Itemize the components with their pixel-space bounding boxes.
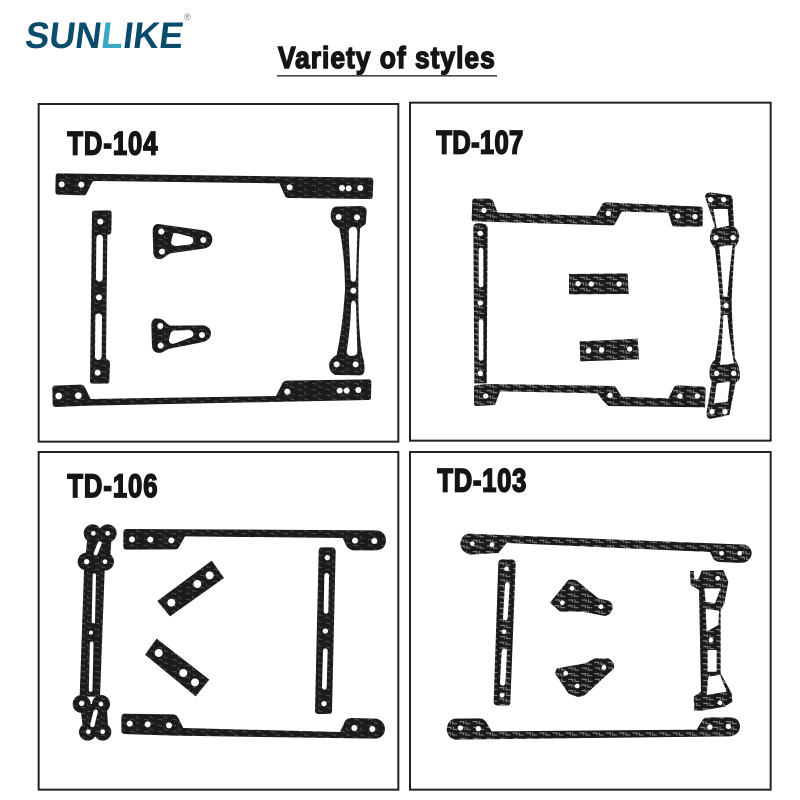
part: lower rectangular plate (580, 339, 639, 361)
part: top plate (472, 199, 703, 227)
logo: SUNLIKE: ® (184, 12, 191, 22)
logo: SUNLIKE: SUNLIKE (23, 14, 186, 56)
label: TD-106: TD-106 (67, 469, 157, 505)
title: Variety of styles: Variety of styles (278, 41, 495, 76)
label: TD-103: TD-103 (437, 464, 526, 499)
part: bottom plate (474, 384, 706, 407)
part: left vertical bar (494, 559, 516, 706)
part: left dog-bone bar (73, 524, 117, 741)
panel: TD-104 (39, 104, 398, 442)
part: bottom plate (121, 714, 385, 739)
part: angled plate lower (145, 639, 209, 696)
part: left vertical bar (473, 223, 488, 383)
part: upper rectangular plate (569, 273, 629, 294)
part: right waisted bar (329, 206, 367, 375)
part: angled plate upper (157, 561, 224, 616)
part: right waisted bar (705, 192, 740, 419)
part: upper arm bracket (550, 579, 613, 616)
panel: TD-106 (39, 452, 398, 790)
panel: TD-107 (410, 103, 771, 441)
part: upper arm bracket (153, 224, 212, 259)
part: bottom long plate (52, 379, 371, 407)
part: top long plate (55, 173, 373, 199)
part: lower arm bracket (151, 318, 211, 353)
panel: TD-103 (410, 452, 771, 790)
label: TD-104: TD-104 (67, 127, 157, 162)
part: top plate (460, 534, 752, 563)
part: bottom plate (447, 717, 740, 740)
part: left vertical bar (90, 210, 112, 384)
part: lower arm bracket (555, 658, 614, 697)
part: right windowed bracket (690, 570, 732, 711)
label: TD-107: TD-107 (436, 126, 523, 161)
part: right vertical bar (315, 547, 336, 714)
part: top plate (123, 529, 386, 550)
